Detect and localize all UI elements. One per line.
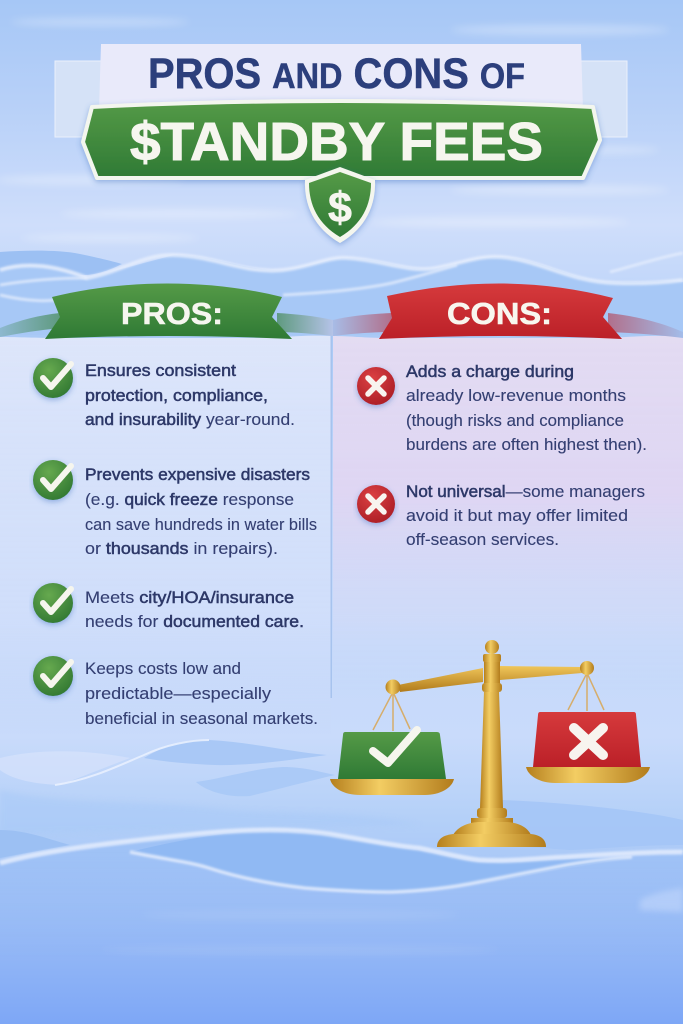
- icon: x: [357, 367, 395, 405]
- text: [406, 483, 645, 549]
- icon: dollar shield: $: [328, 184, 352, 232]
- red block with x: [533, 712, 641, 767]
- pros heading: PROS:: [121, 296, 223, 331]
- icon: check: [33, 460, 73, 500]
- side strip right: [277, 313, 333, 336]
- con item 2: [357, 483, 645, 549]
- pro item 3: [33, 583, 304, 631]
- text: Adds a charge during: [406, 363, 574, 381]
- side strip left: [333, 313, 392, 336]
- text: [85, 362, 295, 429]
- text: (e.g. quick freeze response: [85, 491, 294, 509]
- text: beneficial in seasonal markets.: [85, 710, 318, 728]
- side strip left: [0, 313, 60, 337]
- green block with check: [338, 730, 446, 779]
- text: Ensures consistent: [85, 362, 236, 380]
- con item 1: [357, 363, 647, 454]
- side strip right: [608, 313, 683, 338]
- text: predictable—especially: [85, 685, 272, 703]
- ribbon shape: [45, 284, 292, 339]
- back paper strip: [55, 61, 627, 137]
- text: needs for documented care.: [85, 613, 304, 631]
- icon: dollar shield: [305, 167, 375, 243]
- text: (though risks and compliance: [406, 412, 624, 430]
- beam: [398, 666, 582, 692]
- text: protection, compliance,: [85, 387, 268, 405]
- balance scale: [330, 640, 650, 847]
- right pan: [526, 767, 650, 783]
- text: [406, 363, 647, 454]
- text: Prevents expensive disasters: [85, 466, 310, 484]
- left pan: [330, 779, 454, 795]
- icon: check: [33, 358, 73, 398]
- icon: check: [33, 583, 73, 623]
- pole and base: [437, 640, 546, 847]
- text: burdens are often highest then).: [406, 436, 647, 454]
- text: [85, 589, 304, 631]
- text: avoid it but may offer limited: [406, 507, 628, 525]
- pro item 4: [33, 656, 318, 728]
- text: Keeps costs low and: [85, 660, 241, 678]
- text: [85, 466, 317, 558]
- panel: cons background: [333, 336, 683, 690]
- text: [85, 660, 318, 728]
- front paper strip: [99, 44, 583, 110]
- pro item 1: [33, 358, 295, 429]
- icon: x: [357, 485, 395, 523]
- ribbon shape: [379, 283, 622, 339]
- text: already low-revenue months: [406, 387, 626, 405]
- text: Meets city/HOA/insurance: [85, 589, 294, 607]
- text: can save hundreds in water bills: [85, 516, 317, 534]
- text: and insurability year-round.: [85, 411, 295, 429]
- cons ribbon: [333, 283, 683, 339]
- strings: [373, 673, 604, 731]
- icon: check: [33, 656, 73, 696]
- panel divider: [330, 336, 332, 698]
- text: Not universal—some managers: [406, 483, 645, 501]
- green banner: [83, 101, 600, 178]
- text: off-season services.: [406, 531, 559, 549]
- panel: pros background: [0, 336, 331, 735]
- title panel: [55, 44, 627, 243]
- text: or thousands in repairs).: [85, 540, 278, 558]
- cons heading: CONS:: [447, 296, 552, 331]
- banner title: $TANDBY FEES: [130, 112, 543, 172]
- pro item 2: [33, 460, 317, 558]
- pivot balls: [386, 661, 594, 694]
- title line one: PROS AND CONS OF: [148, 50, 525, 98]
- pros ribbon: [0, 284, 333, 339]
